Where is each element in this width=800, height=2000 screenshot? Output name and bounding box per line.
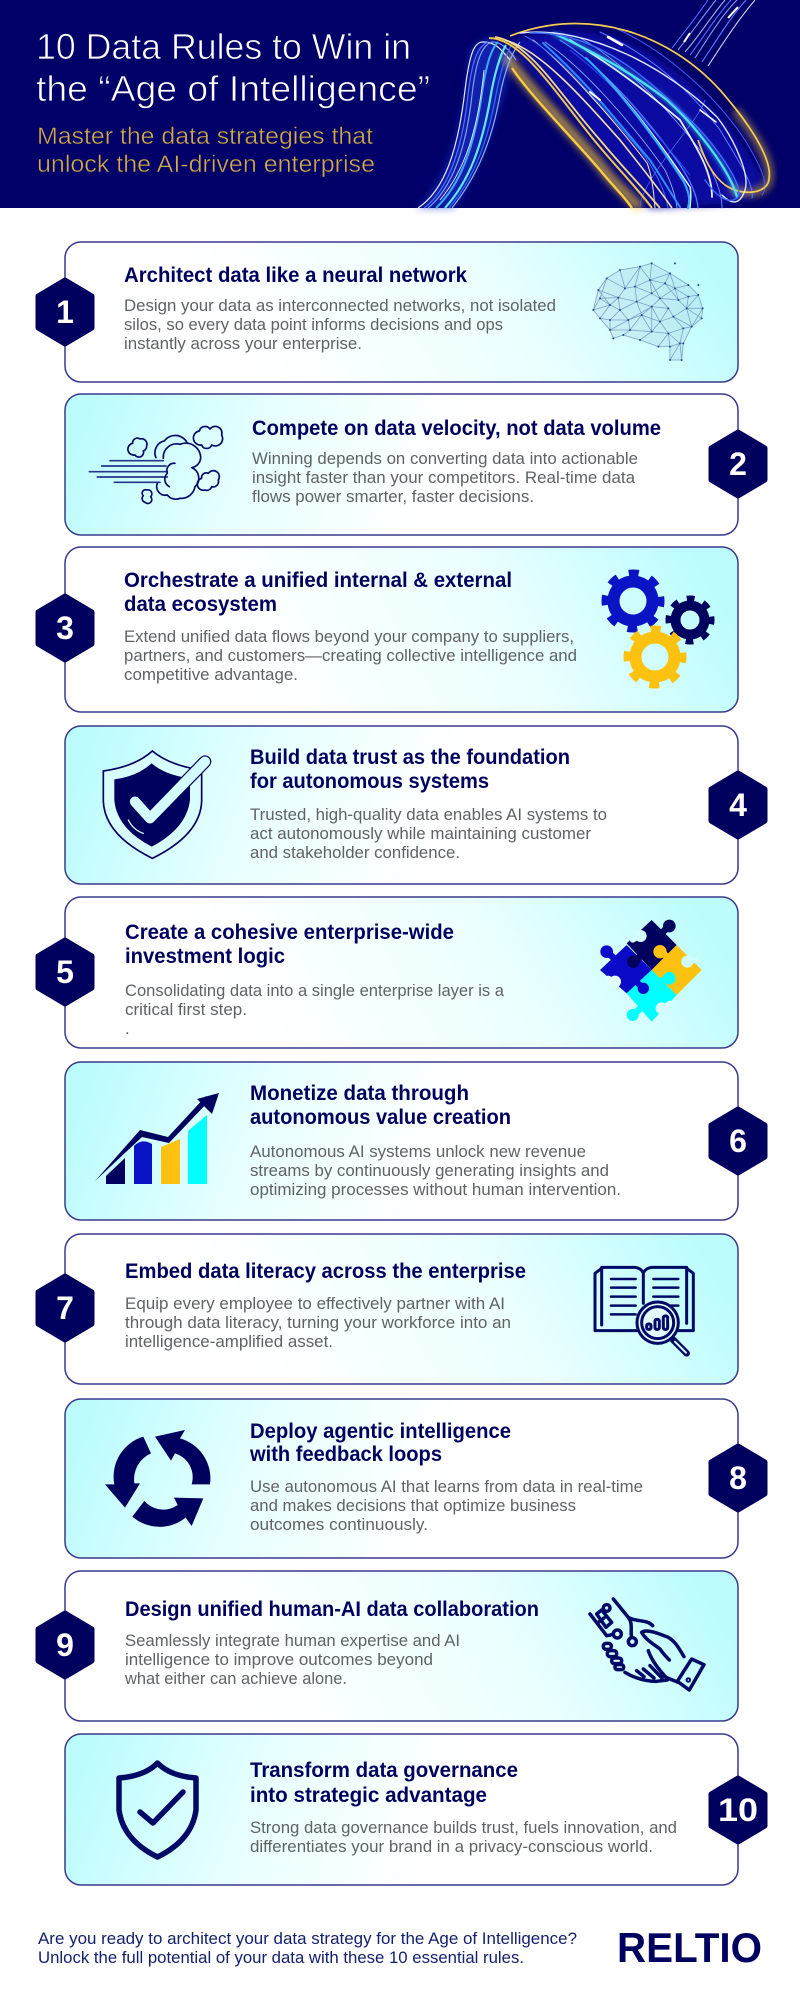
badge: 6 bbox=[711, 1109, 765, 1173]
icon: growth chart bbox=[95, 1093, 219, 1184]
text: rule 4: Trusted, high-quality data enables AI systems to bbox=[250, 806, 607, 824]
text: rule 1 bbox=[124, 297, 556, 353]
text: rule 7: intelligence-amplified asset. bbox=[125, 1333, 333, 1351]
heading: rule 6: Monetize data through bbox=[250, 1082, 469, 1105]
badge: 4 bbox=[711, 773, 765, 837]
text: rule 5: . bbox=[125, 1020, 130, 1038]
text: rule 8: outcomes continuously. bbox=[250, 1516, 428, 1534]
heading: rule 10 bbox=[250, 1759, 518, 1807]
title: the “Age of Intelligence” bbox=[36, 68, 430, 109]
title: 10 Data Rules to Win in bbox=[36, 26, 411, 67]
badge: 6: 6 bbox=[729, 1123, 747, 1159]
panel: rule 10 bbox=[65, 1734, 765, 1885]
icon: gears bbox=[602, 570, 714, 688]
heading: rule 3: data ecosystem bbox=[124, 593, 277, 616]
text: rule 1: instantly across your enterprise. bbox=[124, 335, 362, 353]
text: rule 5 bbox=[125, 982, 505, 1038]
badge: 3: 3 bbox=[56, 610, 74, 646]
heading: rule 3 bbox=[124, 569, 512, 616]
badge: 9: 9 bbox=[56, 1627, 74, 1663]
subtitle: Master the data strategies that bbox=[37, 123, 373, 150]
text: rule 3 bbox=[124, 628, 577, 684]
badge: 10 bbox=[711, 1778, 765, 1842]
text: rule 3: competitive advantage. bbox=[124, 666, 298, 684]
panel: rule 1 bbox=[38, 242, 738, 382]
text: rule 9: intelligence to improve outcomes beyond bbox=[125, 1651, 433, 1669]
badge: 2 bbox=[711, 432, 765, 496]
text: rule 9 bbox=[124, 1632, 460, 1688]
badge: 1: 1 bbox=[56, 294, 74, 330]
heading: rule 5 bbox=[125, 921, 454, 968]
icon: book and magnifier bbox=[595, 1267, 693, 1353]
badge: 5: 5 bbox=[56, 954, 74, 990]
icon: shield with check bbox=[103, 751, 205, 858]
text: rule 4: act autonomously while maintaining customer bbox=[250, 825, 592, 843]
heading: rule 1: Architect data like a neural network bbox=[124, 264, 467, 287]
text: rule 4 bbox=[250, 806, 607, 862]
badge: 10: 10 bbox=[718, 1792, 758, 1828]
panel: rule 9 bbox=[38, 1571, 738, 1721]
text: rule 10: Strong data governance builds trust, fuels innovation, and bbox=[250, 1819, 677, 1837]
heading: rule 5: Create a cohesive enterprise-wide bbox=[125, 921, 454, 944]
text: rule 2: flows power smarter, faster decisions. bbox=[252, 488, 534, 506]
text: rule 1: silos, so every data point informs decisions and ops bbox=[124, 316, 503, 334]
text: rule 1: Design your data as interconnected networks, not isolated bbox=[124, 297, 556, 315]
heading: rule 8 bbox=[249, 1420, 511, 1466]
text: rule 6: streams by continuously generating insights and bbox=[250, 1162, 609, 1180]
badge: 7: 7 bbox=[56, 1290, 74, 1326]
text: rule 10 bbox=[250, 1819, 677, 1856]
heading: rule 6 bbox=[250, 1082, 511, 1129]
panel: rule 2 bbox=[65, 394, 765, 535]
text: rule 7 bbox=[125, 1295, 511, 1351]
text: rule 10: differentiates your brand in a privacy-conscious world. bbox=[250, 1838, 653, 1856]
subtitle: unlock the AI-driven enterprise bbox=[37, 151, 375, 178]
text: rule 2 bbox=[252, 450, 638, 506]
panel: rule 6 bbox=[65, 1062, 765, 1220]
heading: rule 7: Embed data literacy across the enterprise bbox=[125, 1260, 526, 1283]
heading: rule 4: for autonomous systems bbox=[250, 770, 489, 793]
heading: rule 5: investment logic bbox=[125, 945, 285, 968]
text: rule 7: Equip every employee to effectively partner with AI bbox=[125, 1295, 505, 1313]
badge: 2: 2 bbox=[729, 446, 747, 482]
title bbox=[36, 26, 430, 109]
heading: rule 9: Design unified human-AI data collaboration bbox=[125, 1598, 539, 1621]
icon: wind and clouds bbox=[89, 426, 223, 503]
heading: rule 8: with feedback loops bbox=[249, 1443, 442, 1466]
text: rule 8: and makes decisions that optimize business bbox=[250, 1497, 576, 1515]
badge: 4: 4 bbox=[729, 787, 747, 823]
text: rule 3: partners, and customers—creating collective intelligence and bbox=[124, 647, 577, 665]
badge: 7 bbox=[38, 1276, 92, 1340]
text: rule 4: and stakeholder confidence. bbox=[250, 844, 460, 862]
icon: cycle arrows bbox=[105, 1430, 210, 1527]
heading: rule 10: into strategic advantage bbox=[250, 1784, 487, 1807]
heading: rule 6: autonomous value creation bbox=[250, 1106, 511, 1129]
badge: 3 bbox=[38, 596, 92, 660]
panel: rule 7 bbox=[38, 1234, 738, 1384]
heading: rule 2: Compete on data velocity, not data volume bbox=[252, 417, 661, 440]
text: rule 5: Consolidating data into a single enterprise layer is a bbox=[125, 982, 505, 1000]
text: rule 6: Autonomous AI systems unlock new revenue bbox=[250, 1143, 586, 1161]
heading: rule 4: Build data trust as the foundation bbox=[250, 746, 570, 769]
subtitle bbox=[37, 123, 375, 178]
icon: shield outline bbox=[119, 1763, 196, 1857]
text: rule 5: critical first step. bbox=[125, 1001, 247, 1019]
panel: rule 4 bbox=[65, 726, 765, 884]
text: rule 8: Use autonomous AI that learns from data in real-time bbox=[250, 1478, 643, 1496]
logo: Reltio: RELTIO bbox=[617, 1924, 762, 1971]
text: rule 7: through data literacy, turning your workforce into an bbox=[125, 1314, 511, 1332]
badge: 1 bbox=[38, 280, 92, 344]
heading: rule 8: Deploy agentic intelligence bbox=[250, 1420, 511, 1443]
heading: rule 10: Transform data governance bbox=[250, 1759, 518, 1782]
text: rule 2: Winning depends on converting data into actionable bbox=[252, 450, 638, 468]
icon: brain network bbox=[593, 263, 703, 360]
text: rule 9: Seamlessly integrate human expertise and AI bbox=[125, 1632, 460, 1650]
footer call to action: Are you ready to architect your data strategy for the Age of Intelligence? bbox=[38, 1929, 577, 1948]
badge: 5 bbox=[38, 940, 92, 1004]
footer call to action bbox=[38, 1929, 577, 1967]
icon: human and robot handshake bbox=[590, 1599, 704, 1690]
icon: puzzle bbox=[600, 920, 702, 1022]
text: rule 6: optimizing processes without human intervention. bbox=[250, 1181, 621, 1199]
text: rule 3: Extend unified data flows beyond your company to suppliers, bbox=[124, 628, 574, 646]
panel: rule 8 bbox=[65, 1399, 765, 1558]
panel: rule 5 bbox=[38, 897, 738, 1048]
header banner bbox=[0, 0, 800, 208]
panel: rule 3 bbox=[38, 547, 738, 712]
text: rule 8 bbox=[250, 1478, 643, 1534]
badge: 8: 8 bbox=[729, 1460, 747, 1496]
heading: rule 3: Orchestrate a unified internal & external bbox=[124, 569, 512, 592]
text: rule 9: what either can achieve alone. bbox=[124, 1670, 347, 1688]
footer call to action: Unlock the full potential of your data with these 10 essential rules. bbox=[38, 1948, 524, 1967]
badge: 8 bbox=[711, 1446, 765, 1510]
heading: rule 4 bbox=[250, 746, 570, 793]
badge: 9 bbox=[38, 1613, 92, 1677]
text: rule 6 bbox=[250, 1143, 621, 1199]
text: rule 2: insight faster than your competitors. Real-time data bbox=[252, 469, 636, 487]
light ribbon artwork bbox=[417, 0, 769, 208]
